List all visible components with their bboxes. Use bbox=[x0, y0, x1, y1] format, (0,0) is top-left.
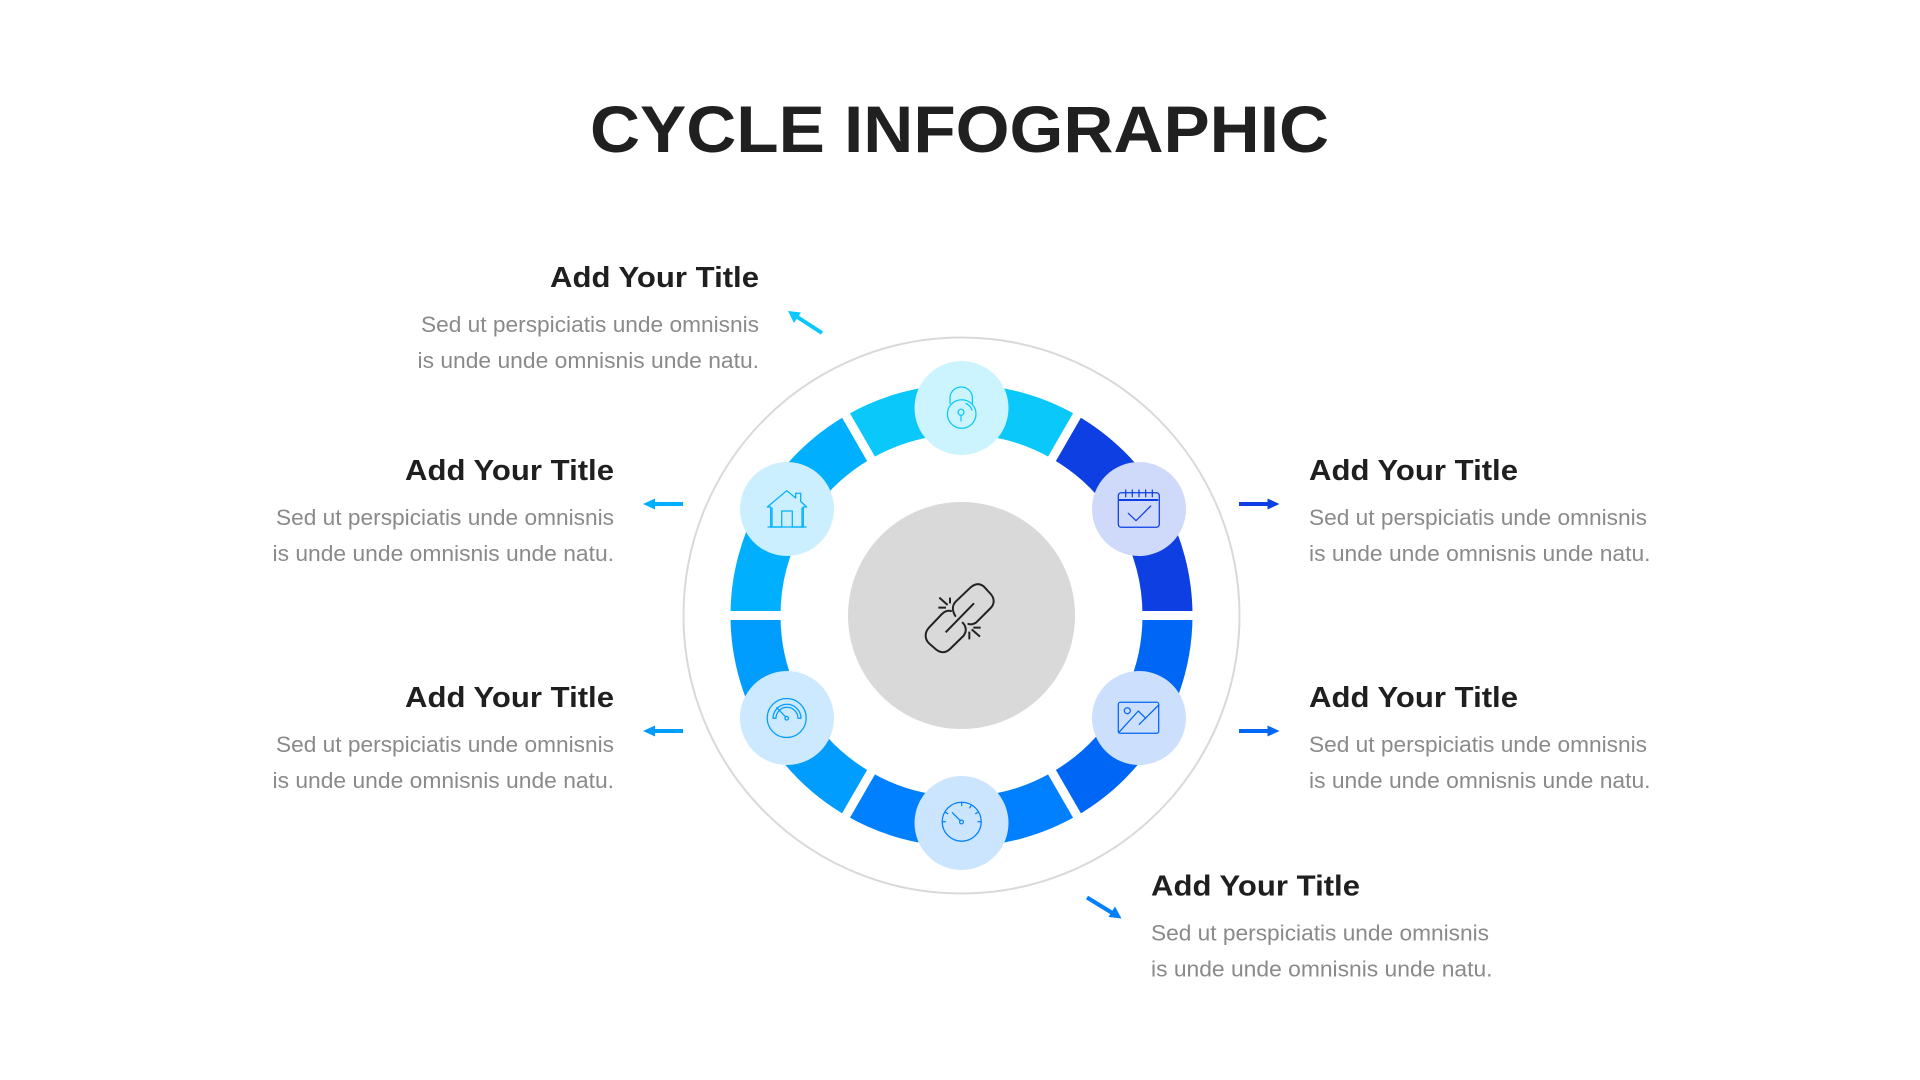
segment: lower left bbox=[756, 616, 858, 794]
text block: top: Add Your Title bbox=[550, 262, 759, 294]
node: top lock bbox=[914, 361, 1008, 455]
icon: padlock bbox=[947, 387, 976, 428]
icon: picture bbox=[1118, 702, 1159, 733]
text block: upper left: Sed ut perspiciatis unde omnisnis bbox=[276, 505, 614, 530]
text block: upper left: is unde unde omnisnis unde natu. bbox=[272, 541, 614, 566]
title: CYCLE INFOGRAPHIC bbox=[590, 92, 1329, 166]
text block: upper right bbox=[1309, 455, 1650, 566]
text block: top: Sed ut perspiciatis unde omnisnis bbox=[421, 312, 759, 337]
icon: calendar bbox=[1118, 490, 1159, 527]
text block: lower left bbox=[272, 682, 614, 793]
arrow: bottom bbox=[1087, 898, 1122, 918]
text block: upper right: Add Your Title bbox=[1309, 455, 1518, 487]
node: upper left house bbox=[740, 462, 834, 556]
text block: upper left bbox=[272, 455, 614, 566]
text block: lower right: is unde unde omnisnis unde natu. bbox=[1309, 768, 1650, 793]
icon: house bbox=[767, 491, 807, 527]
icon: broken chain link bbox=[926, 584, 994, 652]
segment: top bbox=[858, 410, 1064, 437]
icon: speedometer bbox=[942, 802, 981, 841]
arrow: upper left bbox=[643, 498, 683, 510]
arrow: top bbox=[788, 311, 822, 333]
arrow: upper right bbox=[1239, 498, 1280, 510]
text block: lower left: Add Your Title bbox=[405, 682, 614, 714]
text block: top bbox=[418, 262, 759, 373]
text block: top: is unde unde omnisnis unde natu. bbox=[418, 348, 759, 373]
center circle bbox=[848, 502, 1075, 729]
text block: bottom: is unde unde omnisnis unde natu. bbox=[1151, 956, 1492, 982]
node: lower right picture bbox=[1092, 671, 1186, 765]
node: upper right calendar bbox=[1092, 462, 1186, 556]
text block: upper right: Sed ut perspiciatis unde omnisnis bbox=[1309, 505, 1647, 530]
text block: bottom bbox=[1151, 870, 1492, 982]
segment: upper left bbox=[756, 437, 858, 616]
text block: lower left: is unde unde omnisnis unde natu. bbox=[272, 768, 614, 793]
text block: lower right: Sed ut perspiciatis unde omnisnis bbox=[1309, 732, 1647, 757]
segment: bottom bbox=[858, 794, 1064, 821]
segmented cycle ring bbox=[756, 410, 1168, 821]
text block: upper left: Add Your Title bbox=[405, 455, 614, 487]
segment: upper right bbox=[1064, 437, 1168, 616]
arrow: lower right bbox=[1239, 726, 1280, 736]
text block: lower right: Add Your Title bbox=[1309, 682, 1518, 714]
segment: lower right bbox=[1064, 616, 1168, 794]
node: bottom speedometer bbox=[914, 776, 1008, 870]
text block: lower right bbox=[1309, 682, 1650, 793]
text block: bottom: Add Your Title bbox=[1151, 870, 1360, 902]
text block: bottom: Sed ut perspiciatis unde omnisnis bbox=[1151, 920, 1489, 946]
node: lower left gauge bbox=[740, 671, 834, 765]
icon: gauge bbox=[767, 698, 806, 738]
arrow: lower left bbox=[643, 726, 683, 736]
text block: upper right: is unde unde omnisnis unde natu. bbox=[1309, 541, 1650, 566]
outer thin ring bbox=[684, 338, 1240, 894]
text block: lower left: Sed ut perspiciatis unde omnisnis bbox=[276, 732, 614, 757]
